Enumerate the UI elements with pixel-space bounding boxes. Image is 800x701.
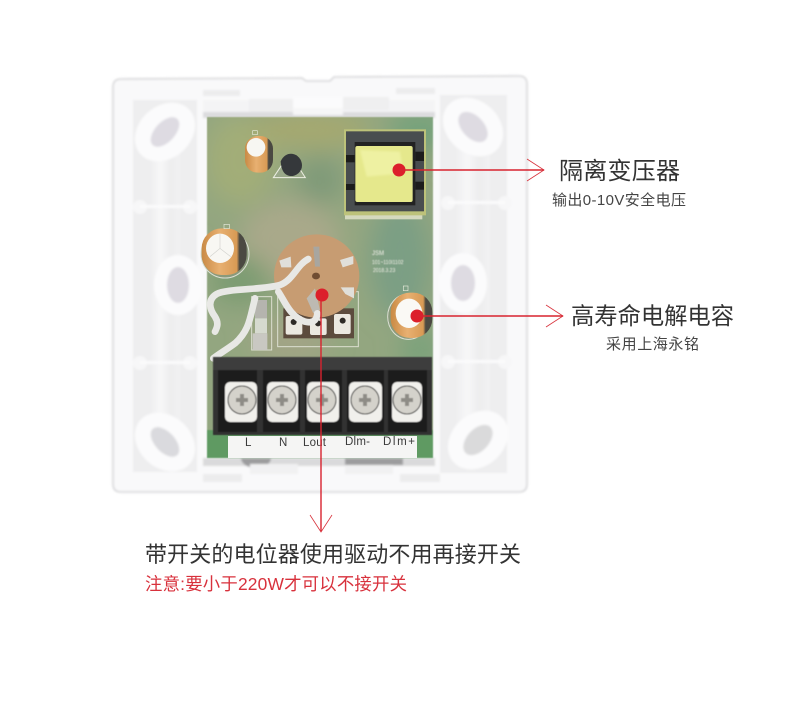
bottom rim recess [203,458,440,482]
label: capacitor [571,303,734,353]
heading: capacitor: 高寿命电解电容 [571,303,734,329]
PCB printing text: JSM [372,251,384,257]
left electrolytic capacitor [201,224,249,278]
terminal labels: L [245,437,252,449]
PCB printing text: 2018.3.23 [373,268,395,274]
switch plate [113,76,527,492]
terminal screw 3 [305,370,342,432]
right mounting channel [431,86,520,481]
white wires [210,259,317,358]
subtext: capacitor: 采用上海永铭 [606,336,699,353]
terminal screw 2 [263,370,300,432]
left top mounting boss [123,91,207,173]
right middle mounting boss [439,253,487,313]
terminal block [213,357,432,435]
PCB printing text: 101~110I1102 [372,260,404,266]
label: potentiometer note [145,542,521,594]
PCB printing text [372,251,404,274]
right electrolytic capacitor [388,286,432,339]
right top mounting boss [431,86,515,168]
terminal labels [245,436,415,449]
terminal screw 1 [218,370,257,432]
small capacitor [245,131,273,173]
left mounting channel [123,91,207,483]
callout: capacitor pointer [410,305,563,327]
transistor [273,154,305,178]
callout: potentiometer pointer [310,288,332,532]
label: isolation transformer [552,158,686,209]
terminal labels: Lout [303,437,327,449]
callout: transformer pointer [392,159,544,181]
right bottom mounting boss [436,399,520,481]
fuse [252,297,272,350]
terminal screw 4 [347,370,384,432]
left bottom mounting boss [123,401,207,483]
terminal labels: N [279,437,287,449]
left middle mounting boss [154,255,202,315]
potentiometer base [278,292,358,347]
heading: potentiometer note: 带开关的电位器使用驱动不用再接开关 [145,542,521,567]
potentiometer disc [274,234,359,318]
circuit board [205,110,450,463]
terminal labels: Dlm+ [383,436,415,448]
terminal screw 5 [388,370,427,432]
subtext: transformer: 输出0-10V安全电压 [552,191,686,209]
terminal label strip [228,436,417,458]
components in zoom coordinates [201,129,432,358]
heading: transformer: 隔离变压器 [559,158,680,185]
top rim recess [203,88,435,118]
infographic canvas [112,74,733,592]
warning note: 注意:要小于220W才可以不接开关 [145,574,407,594]
isolation transformer [344,129,426,219]
terminal labels: Dlm- [345,436,370,448]
